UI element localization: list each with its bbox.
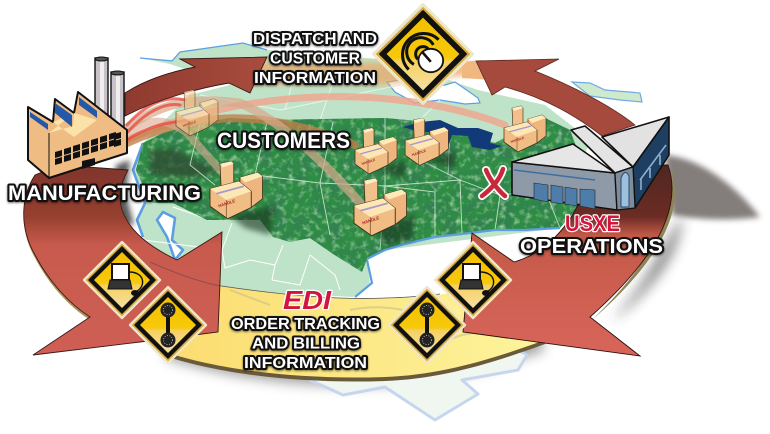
- heading: dispatch and customer information: INFORMATION: [254, 70, 376, 87]
- Great Lakes: [403, 120, 502, 150]
- lake: [157, 212, 183, 260]
- box: north east: HANDLE: [510, 136, 525, 144]
- arrow: lower left ring arrow: [24, 165, 222, 355]
- box: south-west: [210, 161, 262, 219]
- Hudson Bay: [387, 80, 480, 104]
- box: north east: [504, 106, 546, 152]
- box: north central: [405, 118, 448, 165]
- icon: USXE red X logo: [482, 169, 505, 196]
- text: order tracking and billing information: ORDER TRACKING: [231, 316, 380, 333]
- heading: dispatch and customer information: CUSTOMER: [270, 50, 360, 68]
- icon: laptop sign left: [84, 242, 160, 318]
- box: south-west: HANDLE: [218, 198, 236, 208]
- band: dispatch tan behind heading: [250, 60, 492, 85]
- factory windows: [55, 132, 121, 169]
- boxes: customer shipments: [176, 90, 546, 236]
- arrow: top left ring arrow: [125, 57, 267, 116]
- box: north central: HANDLE: [411, 149, 427, 157]
- icon: dispatch satellite sign: [374, 5, 472, 103]
- arrow: top right ring arrow: [476, 59, 635, 136]
- Mexico state lines: [143, 207, 340, 290]
- ring shadows: [165, 215, 682, 386]
- heading: manufacturing: MANUFACTURING: [8, 182, 201, 205]
- box: south central: [354, 178, 406, 236]
- ring inner shadow on ocean: [113, 160, 134, 225]
- map: Central America faded: [310, 340, 527, 420]
- arrow: lower right ring arrow: [463, 165, 675, 356]
- map: pale North America: [122, 43, 642, 297]
- map: green United States: [136, 118, 585, 272]
- state lines: [190, 118, 560, 250]
- box: central: HANDLE: [361, 158, 376, 166]
- drop shadow right of building: [665, 155, 760, 219]
- band: EDI yellow ring: [165, 275, 545, 382]
- heading: dispatch and customer information: [253, 31, 377, 87]
- box: faded north-west: [176, 90, 218, 136]
- coast line: [367, 228, 560, 259]
- heading: USXE: USXE: [565, 211, 620, 236]
- white ocean left of river: [122, 170, 145, 240]
- box shadows: [230, 150, 455, 245]
- icon: factory: [28, 57, 127, 178]
- heading: EDI: EDI: [283, 285, 332, 315]
- text: order tracking and billing information: [231, 316, 380, 372]
- icon: phone sign right: [389, 287, 465, 363]
- chimneys: [95, 57, 124, 130]
- translucent arcs: [127, 97, 505, 205]
- shadow on map: [150, 148, 220, 178]
- heading: customers: CUSTOMERS: [217, 128, 350, 153]
- text: order tracking and billing information: AND BILLING: [252, 336, 360, 352]
- box: south central: HANDLE: [362, 215, 380, 225]
- heading: operations: OPERATIONS: [520, 236, 663, 258]
- icon: laptop sign right: [435, 242, 511, 318]
- rivers and west coast: [133, 143, 145, 237]
- text: order tracking and billing information: INFORMATION: [244, 355, 367, 372]
- icon: USXE operations building: [512, 117, 669, 210]
- icon: phone sign left: [130, 287, 206, 363]
- heading: dispatch and customer information: DISPATCH AND: [253, 31, 377, 48]
- box: faded north-west: HANDLE: [182, 120, 197, 128]
- gulf coast: [355, 260, 372, 297]
- box: central: [355, 128, 397, 174]
